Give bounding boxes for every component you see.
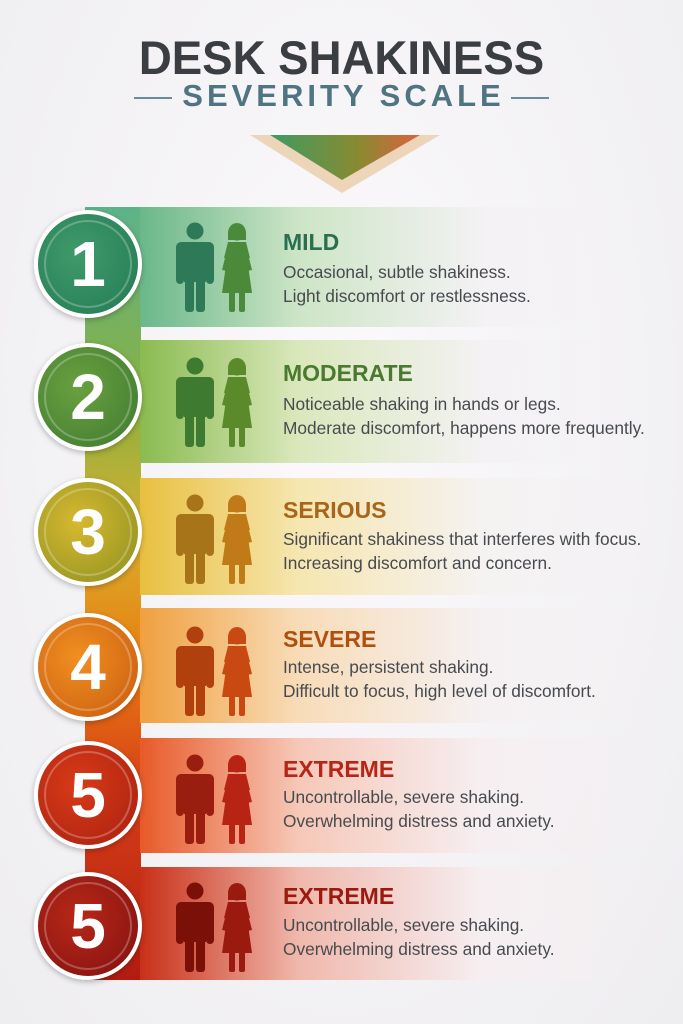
row 4: Difficult to focus, high level of discomfort. — [283, 681, 596, 701]
row 6: Overwhelming distress and anxiety. — [283, 939, 554, 959]
row 1: MILD — [283, 229, 339, 255]
subtitle: SEVERITY SCALE — [182, 78, 505, 113]
row 4: 4 — [70, 631, 106, 703]
row 5: EXTREME — [283, 756, 394, 782]
row 1 — [31, 207, 531, 327]
row 3: SERIOUS — [283, 497, 387, 523]
row 2: MODERATE — [283, 360, 413, 386]
row 4 — [31, 608, 596, 726]
row 6: 5 — [70, 890, 106, 962]
row 6 — [31, 867, 554, 985]
row 2: 2 — [70, 361, 106, 433]
row 3: 3 — [70, 496, 106, 568]
icon: down arrow — [250, 135, 440, 193]
vertical scale bar — [85, 207, 141, 980]
row 5: Overwhelming distress and anxiety. — [283, 811, 554, 831]
row 2: Noticeable shaking in hands or legs. — [283, 394, 561, 414]
row 3: Significant shakiness that interferes with focus. — [283, 529, 641, 549]
row 5 — [31, 738, 554, 854]
row 6: EXTREME — [283, 883, 394, 909]
row 1: Light discomfort or restlessness. — [283, 286, 531, 306]
row 1: Occasional, subtle shakiness. — [283, 262, 511, 282]
row 2 — [31, 340, 645, 463]
row 3: Increasing discomfort and concern. — [283, 553, 552, 573]
row 5: 5 — [70, 759, 106, 831]
row 4: Intense, persistent shaking. — [283, 657, 493, 677]
row 6: Uncontrollable, severe shaking. — [283, 915, 524, 935]
row 3 — [31, 477, 641, 595]
row 2: Moderate discomfort, happens more frequently. — [283, 418, 645, 438]
title: DESK SHAKINESS — [139, 31, 544, 84]
row 1: 1 — [70, 228, 106, 300]
row 5: Uncontrollable, severe shaking. — [283, 787, 524, 807]
row 4: SEVERE — [283, 626, 376, 652]
